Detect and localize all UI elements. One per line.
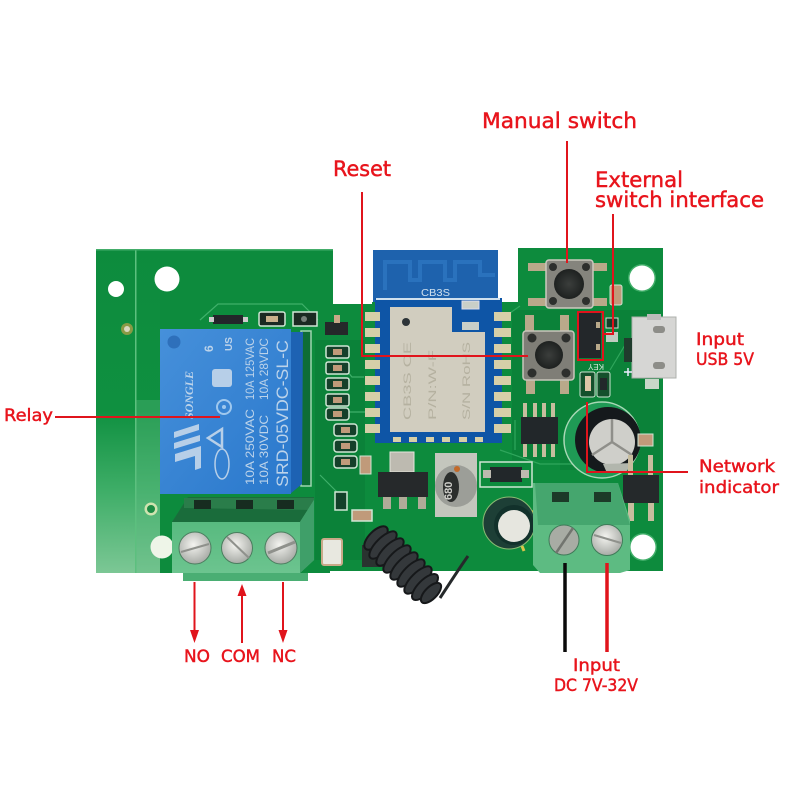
panel: circuit board: [96, 248, 663, 573]
label: NC: NC: [272, 647, 296, 667]
diode: [480, 462, 532, 487]
output MOSFET: [623, 455, 659, 521]
relay: [160, 329, 311, 494]
external switch connector: KEY: [587, 362, 604, 371]
screws: [179, 532, 297, 564]
traces: [200, 304, 366, 500]
line: input positive: [605, 563, 609, 652]
inductor: [435, 453, 477, 517]
label: network indicator: Network: [699, 457, 775, 477]
line: reset: [362, 192, 528, 356]
label: external switch interface: switch interface: [595, 188, 764, 212]
arrow: COM: [241, 592, 243, 643]
relay text: US: [224, 337, 235, 351]
coil windings: [360, 522, 444, 606]
shield markings: S/N RoHS: [461, 342, 473, 420]
label: input DC: DC 7V-32V: [554, 676, 638, 696]
line: external switch: [604, 214, 613, 334]
label: input DC: [554, 656, 638, 696]
label: manual switch: Manual switch: [482, 109, 637, 133]
terminal block: NO COM NC: [172, 497, 314, 581]
shield markings: P/N:W-F: [427, 350, 439, 420]
relay text: 10A 125VAC: [243, 338, 257, 400]
large capacitor: [564, 402, 653, 478]
board substrate: [96, 248, 663, 573]
relay logo: [174, 369, 232, 479]
label: network indicator: [699, 457, 779, 498]
label: reset: Reset: [333, 157, 391, 181]
relay text: 10A 30VDC: [257, 415, 271, 485]
mounting holes: [108, 264, 657, 561]
line: relay: [55, 416, 220, 418]
shield markings: CB3S CE: [402, 342, 414, 420]
relay text: [182, 337, 292, 487]
connector outline: [578, 312, 603, 360]
SOIC chip: [521, 403, 558, 457]
label: NO: NO: [184, 647, 210, 667]
manual switch button: [528, 260, 607, 308]
arrow: NO: [194, 582, 196, 632]
label: input DC: Input: [573, 656, 620, 676]
metal shield: [390, 307, 485, 432]
label: input USB 5V: [696, 330, 754, 370]
module label: CB3S: [421, 288, 450, 299]
label: COM: COM: [221, 647, 260, 667]
label: network indicator: indicator: [699, 478, 779, 498]
relay-side small components: [209, 312, 392, 567]
relay text: 10A 250VAC: [243, 409, 257, 485]
relay text: 6: [202, 345, 216, 352]
terminal block: DC input: [533, 483, 630, 573]
label: external switch interface: [595, 168, 764, 212]
shield markings: [402, 342, 473, 420]
darker copper pour: [512, 310, 660, 470]
antenna-side faded board area: [96, 249, 160, 573]
label: external switch interface: External: [595, 168, 683, 192]
wifi module: CB3S: [365, 250, 511, 443]
arrow: NC: [282, 582, 284, 632]
external switch connector: [579, 285, 622, 371]
line: manual switch: [566, 141, 568, 263]
label: input USB 5V: USB 5V: [696, 350, 754, 370]
arrowheads: [190, 584, 288, 643]
relay text: SRD-05VDC-SL-C: [273, 340, 292, 487]
label: relay: Relay: [4, 406, 53, 426]
relay text: SONGLE: [182, 371, 196, 419]
inductor: 680: [443, 482, 455, 500]
small capacitor: [483, 497, 539, 551]
antenna coil: [360, 522, 468, 606]
line: network indicator: [587, 402, 688, 472]
regulator SOT-223: [378, 452, 428, 509]
network indicator LED: [580, 372, 610, 397]
line: input negative: [563, 563, 567, 652]
castellated pads: [365, 312, 511, 442]
coil wire tail: [440, 556, 468, 598]
micro USB port: [624, 314, 676, 389]
reset button: [523, 315, 574, 394]
antenna trace: [385, 262, 495, 290]
label: input USB 5V: Input: [696, 330, 744, 350]
relay text: 10A 28VDC: [257, 338, 271, 400]
callout lines and arrows: [55, 141, 688, 652]
